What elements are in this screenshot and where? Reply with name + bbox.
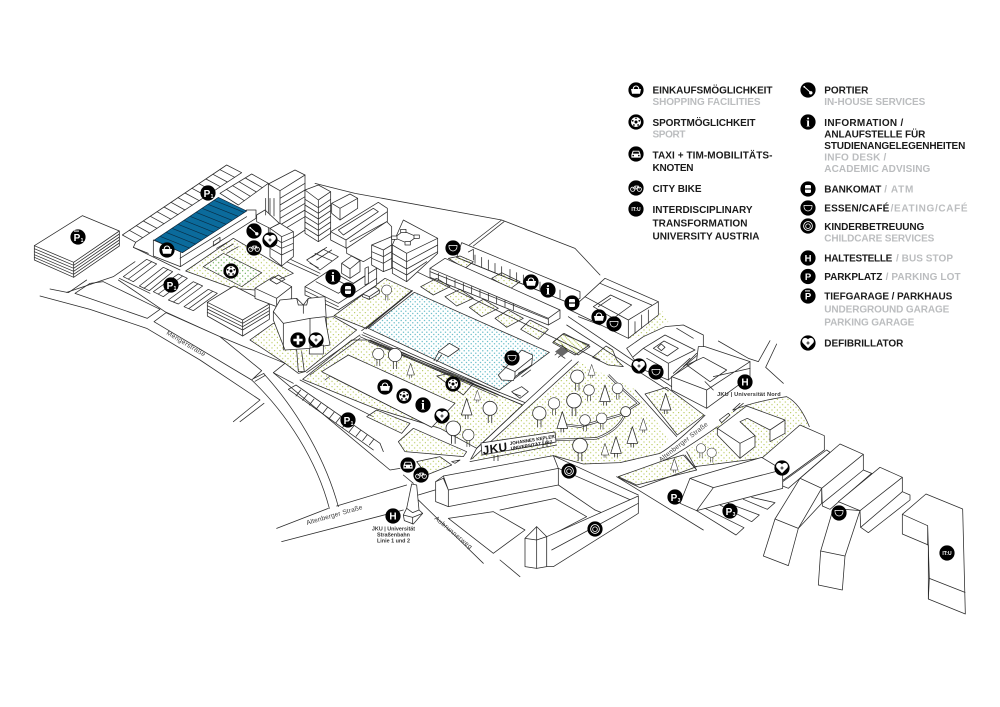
icon: P1 upper: P xyxy=(204,189,211,200)
upper parking stripes xyxy=(122,165,242,242)
legend: parking lot xyxy=(800,269,961,284)
cafe building on plaza xyxy=(498,350,533,381)
trees near library xyxy=(373,348,497,447)
bottom building group xyxy=(436,456,638,568)
icon: childcare xyxy=(561,463,577,479)
plaza pad xyxy=(438,343,459,357)
icon: info xyxy=(540,282,556,299)
legend: sport: SPORTMÖGLICHKEIT xyxy=(652,116,756,129)
label: JKU Universität tram stop xyxy=(372,526,415,544)
long block 1 xyxy=(763,478,822,566)
legend: taxi: TAXI + TIM-MOBILITÄTS- xyxy=(652,148,772,161)
legend: garage: TIEFGARAGE / PARKHAUS xyxy=(824,292,953,303)
tower side block xyxy=(270,223,293,266)
icon: tram stop xyxy=(385,508,401,524)
icon: info: i xyxy=(546,284,550,299)
road labels xyxy=(165,330,781,551)
legend: childcare: KINDERBETREUUNG xyxy=(824,222,925,233)
upper block xyxy=(762,425,824,480)
label: Altenberger Straße west: Altenberger Straße xyxy=(306,504,364,527)
icon: taxi xyxy=(400,457,416,473)
legend: ATM: / ATM xyxy=(884,185,913,196)
legend: ATM xyxy=(800,181,913,197)
L-shaped building xyxy=(717,406,785,458)
plaza: cyan dotted xyxy=(368,292,549,390)
icon: cafe xyxy=(831,505,847,521)
legend: city bike xyxy=(628,180,702,196)
legend: defibrillator: DEFIBRILLATOR xyxy=(824,339,904,350)
icon: P1 garage: 1 xyxy=(81,238,84,244)
sports field xyxy=(186,238,293,290)
icon: first aid xyxy=(290,332,306,348)
middle blocks xyxy=(800,444,872,509)
legend: taxi xyxy=(628,146,772,174)
icon: P3 xyxy=(667,489,683,505)
legend: information: ANLAUFSTELLE FÜR xyxy=(824,128,926,141)
yellow area around twin building xyxy=(250,317,357,373)
roof-pattern building xyxy=(392,220,438,282)
icon: IT:U: IT:U xyxy=(942,551,952,557)
west area: parking, supermarket, garages xyxy=(34,165,360,375)
legend: porter: IN-HOUSE SERVICES xyxy=(824,97,926,108)
icon: defibrillator xyxy=(308,332,324,348)
icon: P1 south: P xyxy=(344,416,351,427)
label: Altenberger Straße east: Altenberger Straße xyxy=(658,421,710,464)
label: JKU Universität tram stop: Straßenbahn xyxy=(377,532,410,538)
long building rear xyxy=(457,243,580,303)
icon: defibrillator xyxy=(631,358,647,374)
road lines by plaza xyxy=(368,340,572,459)
legend: parking lot: PARKPLATZ xyxy=(824,272,882,283)
low blocks with i icon xyxy=(305,268,377,310)
label: Aubrunnerweg: Aubrunnerweg xyxy=(433,515,473,551)
central complex xyxy=(627,325,703,380)
legend: garage: PARKING GARAGE xyxy=(824,318,915,329)
legend: parking lot: / PARKING LOT xyxy=(886,272,961,283)
main plaza and central campus xyxy=(268,170,600,397)
icon: P1 south: 1 xyxy=(351,421,354,427)
label: JKU Universität tram stop: JKU | Universität xyxy=(372,526,415,532)
legend: bus stop: H xyxy=(805,253,812,264)
library building xyxy=(322,355,455,427)
legend xyxy=(628,82,968,351)
icon: childcare xyxy=(587,521,603,537)
yellow pads xyxy=(367,410,410,433)
icon: cafe xyxy=(445,240,461,256)
legend: cafe: /EATING/CAFÉ xyxy=(891,202,968,215)
icon: bus stop north: H xyxy=(741,378,749,389)
legend: IT:U: INTERDISCIPLINARY xyxy=(652,205,753,216)
small block xyxy=(255,277,292,307)
legend: information: STUDIENANGELEGENHEITEN xyxy=(824,141,965,152)
road lines xyxy=(567,317,783,470)
icon: P3: P xyxy=(671,493,678,504)
icon: cafe xyxy=(648,364,664,380)
road island 1 xyxy=(75,282,160,318)
legend: bus stop xyxy=(800,250,953,266)
icon: P3 lot: 3 xyxy=(733,512,736,518)
legend: city bike: CITY BIKE xyxy=(652,184,702,195)
legend: porter: PORTIER xyxy=(824,86,869,97)
long block 2 xyxy=(818,508,860,590)
legend: IT:U: UNIVERSITY AUSTRIA xyxy=(652,232,760,243)
towers xyxy=(268,170,305,247)
south roads xyxy=(277,445,557,577)
icon: P1 south xyxy=(340,412,356,428)
trees in park xyxy=(533,364,716,473)
legend: garage xyxy=(800,288,953,329)
yellow pad upper left xyxy=(334,278,412,328)
legend: information: INFO DESK / xyxy=(824,153,887,164)
icon: cafe xyxy=(606,316,622,332)
twin building xyxy=(273,297,330,350)
tram obelisk xyxy=(403,484,423,524)
icon: P3 lot xyxy=(722,503,738,519)
legend: garage: P xyxy=(805,292,812,302)
plaza small pad xyxy=(512,387,528,398)
label: JKU Universität Nord: JKU | Universität Nord xyxy=(717,392,781,398)
legend: sport: SPORT xyxy=(652,130,686,141)
icon: tram stop: H xyxy=(389,512,397,523)
icon: porter xyxy=(246,223,262,239)
icon: defibrillator xyxy=(262,232,278,248)
legend: IT:U: IT:U xyxy=(631,207,641,213)
map icons xyxy=(70,185,955,561)
icon: P1 upper: 1 xyxy=(211,194,214,200)
legend: sport xyxy=(628,114,756,141)
courtyard outlines xyxy=(448,498,620,553)
icon: defibrillator xyxy=(774,460,790,476)
local road outline xyxy=(67,247,180,293)
parking stalls P3 xyxy=(697,497,775,535)
legend: bus stop: HALTESTELLE xyxy=(824,254,893,265)
icon: shopping xyxy=(591,309,607,325)
park and green areas xyxy=(472,310,809,485)
legend: IT:U xyxy=(628,201,760,243)
legend: information: ACADEMIC ADVISING xyxy=(824,164,931,175)
icon: P1 upper xyxy=(200,185,216,201)
blue roof xyxy=(154,197,247,253)
road xyxy=(617,467,703,530)
legend: shopping: SHOPPING FACILITIES xyxy=(652,97,761,108)
lower parking stalls xyxy=(123,259,157,282)
supermarket building xyxy=(153,210,256,267)
P3 building xyxy=(680,457,783,511)
legend: garage: UNDERGROUND GARAGE xyxy=(824,305,950,316)
icon: P1 lower xyxy=(163,277,179,293)
icon: bike xyxy=(246,240,262,256)
JKU sign: JKU xyxy=(482,440,508,457)
icon: P1 garage xyxy=(70,229,86,245)
wing xyxy=(547,496,638,567)
icon: info: i xyxy=(331,271,335,286)
icon: P3: 3 xyxy=(678,498,681,504)
legend: information xyxy=(800,114,965,175)
road island 2 xyxy=(154,313,262,380)
icon: P1 garage: P xyxy=(74,233,81,244)
legend: shopping xyxy=(628,82,772,108)
JKU sign: JOHANNES KEPLER xyxy=(509,434,556,446)
center garage xyxy=(207,286,269,336)
legend: shopping: EINKAUFSMÖGLICHKEIT xyxy=(652,84,772,97)
icon: cafe plaza xyxy=(504,350,520,366)
icon: info: i xyxy=(421,399,425,414)
icon: ATM xyxy=(564,295,580,311)
icon: IT:U xyxy=(939,545,955,561)
legend: childcare: CHILDCARE SERVICES xyxy=(824,234,935,245)
third block xyxy=(838,467,910,533)
label: Mengerstraße: Mengerstraße xyxy=(165,330,207,359)
icon: shopping xyxy=(523,274,539,290)
icon: bus stop north xyxy=(737,374,753,390)
icon: P1 lower: 1 xyxy=(174,286,177,292)
legend: defibrillator xyxy=(800,335,904,351)
courtyard building xyxy=(570,278,658,338)
icon: P1 lower: P xyxy=(167,281,174,292)
label: JKU Universität tram stop: Linie 1 und 2 xyxy=(377,538,410,544)
icon: P3 lot: P xyxy=(726,507,733,518)
icon: sport xyxy=(445,376,461,392)
icon: defibrillator xyxy=(434,408,450,424)
ITU block xyxy=(902,494,965,614)
library yellow area xyxy=(303,340,523,448)
icon: shopping xyxy=(159,242,175,258)
legend: taxi: KNOTEN xyxy=(652,163,694,174)
legend: information: i xyxy=(806,114,810,129)
icon: sport xyxy=(396,388,412,404)
legend: bus stop: / BUS STOP xyxy=(896,254,953,265)
icon: info xyxy=(415,397,431,414)
JKU sign xyxy=(481,432,556,461)
JKU sign: UNIVERSITÄT LINZ xyxy=(510,438,553,451)
outer perimeter line xyxy=(315,183,600,275)
icon: ATM xyxy=(340,282,356,298)
icon: shopping xyxy=(377,379,393,395)
road lines xyxy=(360,272,600,397)
south campus: library and pads xyxy=(273,340,572,483)
legend: childcare xyxy=(800,218,935,245)
legend: IT:U: TRANSFORMATION xyxy=(652,218,748,229)
north building xyxy=(672,347,750,408)
legend: parking lot: P xyxy=(805,272,812,283)
parking stalls xyxy=(288,385,380,450)
west roads xyxy=(40,280,338,508)
legend: cafe: ESSEN/CAFÉ xyxy=(824,202,890,215)
east campus xyxy=(567,278,785,470)
legend: information: INFORMATION / xyxy=(824,118,904,129)
legend: cafe xyxy=(800,200,968,216)
campus map xyxy=(34,165,965,614)
icon: sport xyxy=(223,263,239,279)
P1 garage block xyxy=(34,216,119,277)
gabled building xyxy=(436,456,558,507)
tower xyxy=(525,527,547,568)
icon: bike xyxy=(413,467,429,483)
legend: porter xyxy=(800,82,926,108)
legend: ATM: BANKOMAT xyxy=(824,185,881,196)
icon: info xyxy=(325,269,341,286)
south-east blocks xyxy=(617,425,965,614)
